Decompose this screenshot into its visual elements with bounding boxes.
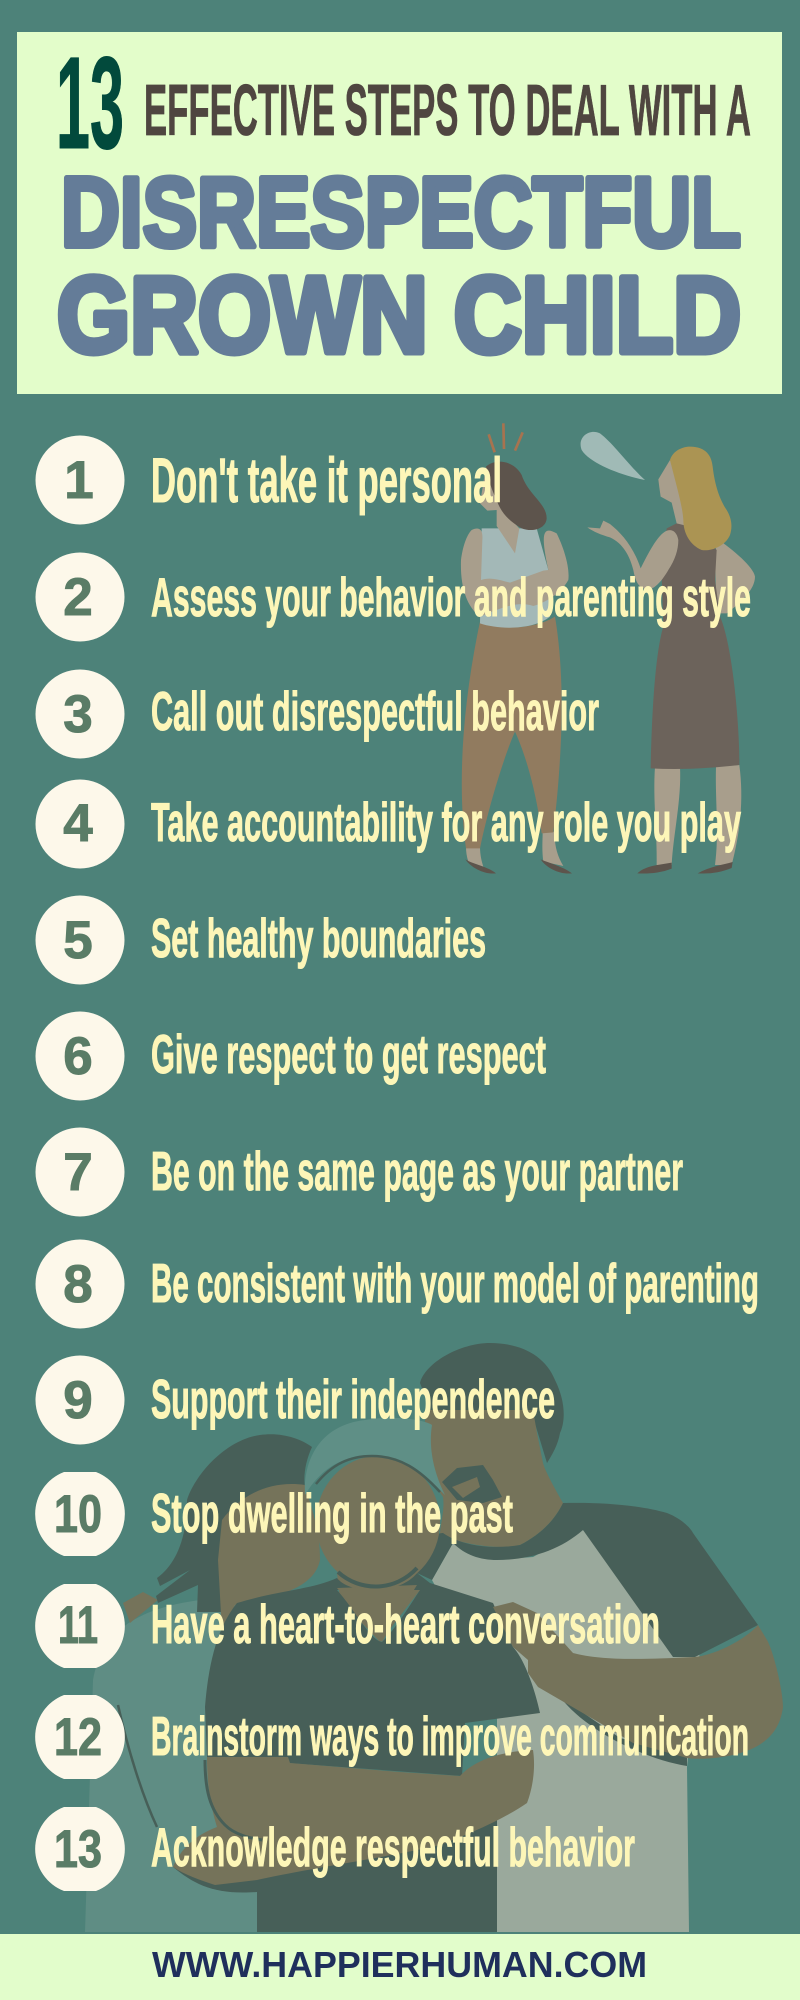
list: step 8	[36, 1240, 759, 1328]
website URL: WWW.HAPPIERHUMAN.COM	[152, 1944, 647, 1985]
list: step 4: 4	[63, 794, 93, 853]
list: step 7: 7	[63, 1143, 93, 1202]
list: step 6: 6	[63, 1027, 93, 1086]
list: step 7	[36, 1128, 683, 1216]
list: step 5: 5	[63, 911, 93, 970]
man	[417, 1343, 758, 1932]
illustration: two women arguing	[461, 423, 755, 874]
list: step 10: Stop dwelling in the past	[151, 1482, 513, 1544]
footer band	[0, 1934, 800, 2000]
icon: shock lines	[489, 423, 523, 452]
list: step 5	[36, 896, 486, 984]
right woman	[587, 447, 755, 874]
list: step 12: 12	[54, 1708, 102, 1767]
list: step 1	[36, 436, 502, 524]
illustration: family hugging	[85, 1343, 783, 1932]
list: step 13	[35, 1807, 635, 1891]
list: step 1: 1	[64, 451, 94, 510]
list: step 9	[36, 1356, 555, 1444]
list: step 8: 8	[63, 1255, 93, 1314]
list: step 2	[36, 552, 751, 642]
list: step 5: Set healthy boundaries	[151, 907, 486, 969]
list: step 12	[35, 1695, 749, 1779]
man's arm	[493, 1602, 783, 1766]
list: step 3	[36, 670, 599, 758]
list: step 10: 10	[54, 1485, 102, 1544]
icon: speech bubble	[581, 432, 645, 480]
list: step 2: 2	[63, 568, 93, 627]
girl on left	[85, 1434, 330, 1932]
panel: title header	[17, 29, 782, 394]
list: step 13: 13	[54, 1820, 102, 1879]
child in headband	[173, 1418, 540, 1932]
list: step 11: 11	[58, 1596, 98, 1655]
list: step 6	[36, 1012, 546, 1100]
list: step 1: Don't take it personal	[151, 446, 502, 516]
list: step 4	[36, 780, 741, 868]
list: step 9: 9	[63, 1371, 93, 1430]
panel: title header: 13	[56, 29, 124, 176]
left woman	[461, 462, 572, 874]
list: step 3: 3	[63, 685, 93, 744]
list: step 11	[35, 1584, 660, 1668]
list: step 10	[35, 1472, 513, 1556]
